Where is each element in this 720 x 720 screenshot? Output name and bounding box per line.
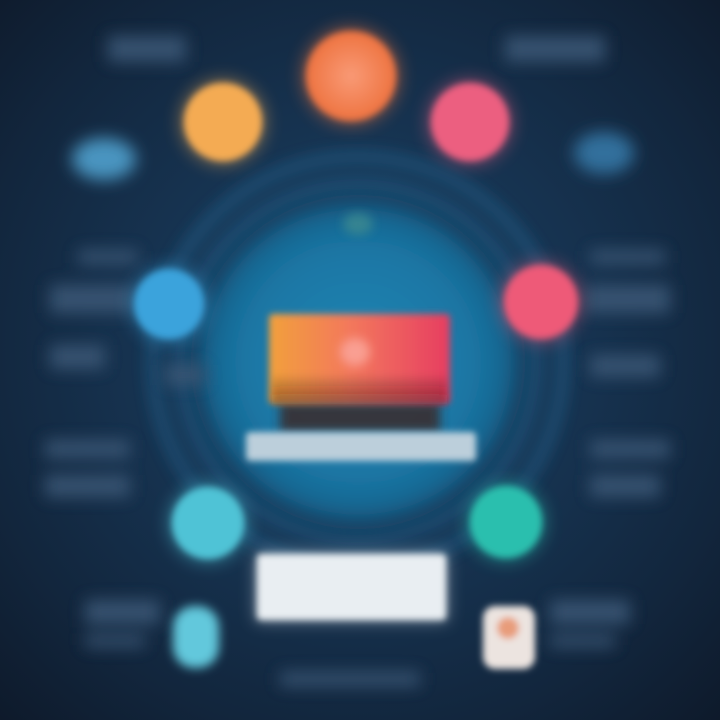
icon: laptop	[246, 314, 476, 461]
icon: pink circle right	[499, 260, 583, 344]
icon: pink circle top right	[426, 78, 514, 166]
laptop screen	[269, 314, 450, 404]
laptop keyboard	[246, 432, 476, 461]
central disc	[198, 202, 518, 522]
icon: cyan circle lower left	[167, 482, 249, 564]
icon: cyan pill lower left	[173, 606, 219, 668]
white card	[255, 552, 448, 622]
small disc icon	[343, 213, 373, 235]
left faint text blocks	[45, 36, 205, 647]
icon: teal circle lower right	[465, 481, 547, 563]
outer rings	[153, 157, 563, 567]
icon: white badge lower right	[483, 606, 535, 669]
screen highlight	[340, 338, 370, 366]
icon: yellow circle	[179, 78, 267, 166]
icon: blue ellipse right	[574, 132, 634, 174]
screen shading	[272, 316, 447, 404]
icon: blue circle left	[129, 264, 209, 344]
right faint text blocks	[280, 36, 670, 686]
icon: blue ellipse left	[72, 138, 136, 180]
icon: top orange circle	[301, 26, 401, 126]
laptop base shadow	[280, 402, 440, 432]
